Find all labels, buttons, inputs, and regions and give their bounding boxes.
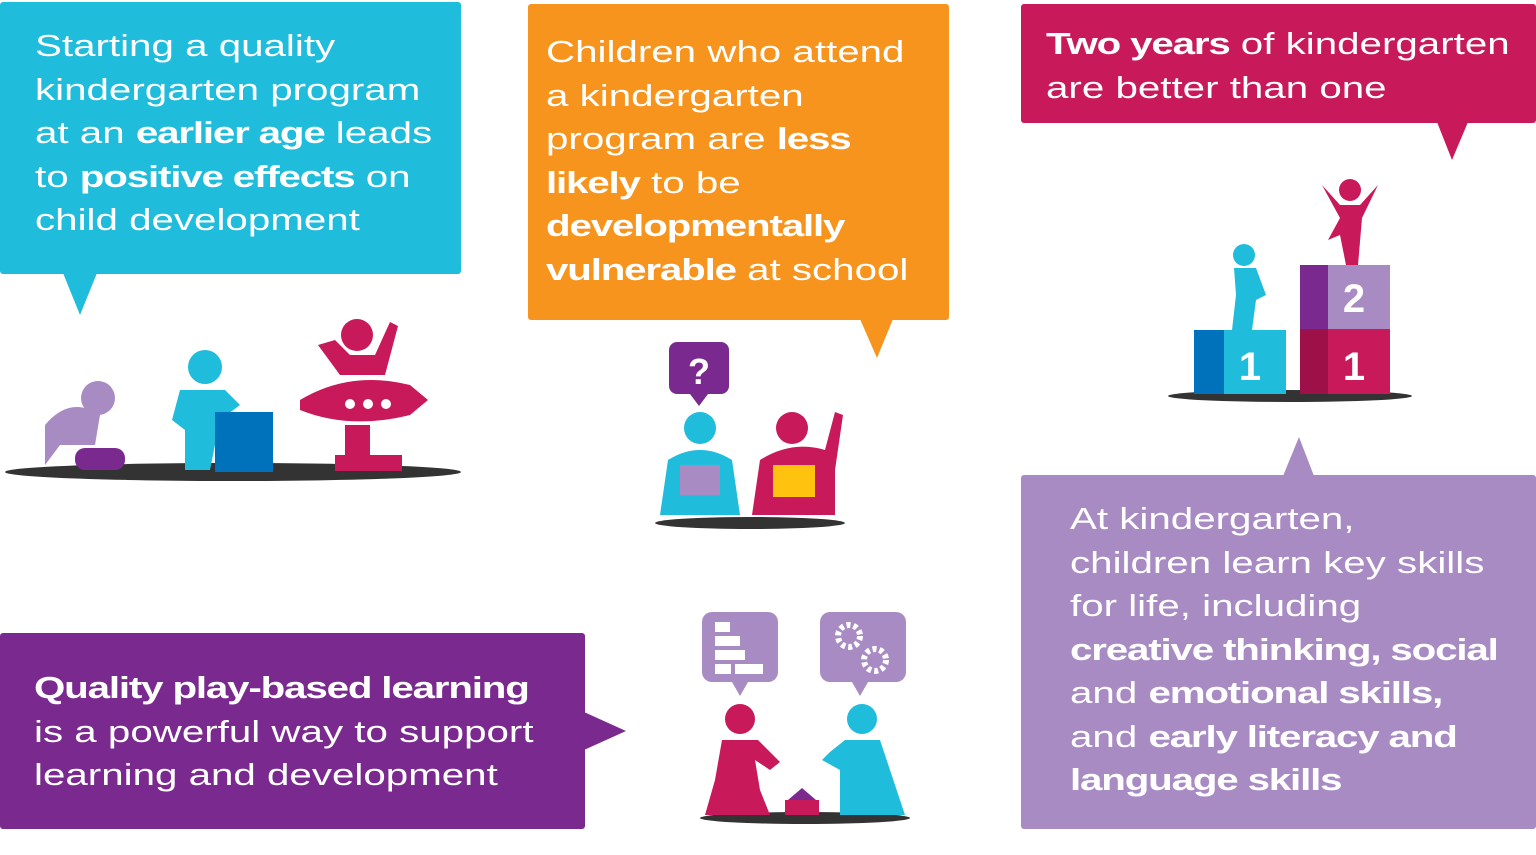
panel: lavender key skills: language skills	[1070, 762, 1341, 797]
panel: purple play-based: is a powerful way to support	[34, 714, 534, 748]
icon: podium: 2	[1343, 277, 1365, 321]
panel: purple play-based: learning and development	[34, 757, 498, 792]
panel: orange less vulnerable	[528, 4, 949, 320]
icon: children playing	[5, 319, 461, 481]
panel: blue earlier age: child development	[35, 202, 360, 237]
panel: pink two years	[1021, 4, 1536, 123]
panel: purple play-based: Quality play-based learning	[34, 670, 529, 705]
arrow: purple tail	[584, 712, 626, 750]
arrow: blue tail	[63, 273, 97, 315]
panel: lavender key skills: creative thinking, social	[1070, 632, 1498, 666]
icon: podium: 1	[1343, 345, 1365, 389]
icon: reading children: ?	[688, 351, 710, 392]
panel: lavender key skills	[1021, 475, 1536, 829]
panel: lavender key skills: children learn key skills	[1070, 544, 1484, 580]
panel: orange less vulnerable: developmentally	[546, 208, 844, 243]
panel: orange less vulnerable: program are less	[546, 121, 850, 156]
panel: orange less vulnerable: likely to be	[546, 164, 741, 200]
panel: orange less vulnerable: a kindergarten	[546, 78, 804, 112]
icon: building and thinking children	[700, 612, 910, 824]
icon: reading children	[655, 342, 845, 529]
panel: lavender key skills: and emotional skills,	[1070, 675, 1442, 710]
panel: orange less vulnerable: vulnerable at school	[546, 252, 908, 286]
arrow: orange tail	[860, 319, 893, 358]
panel: lavender key skills: for life, including	[1070, 588, 1361, 623]
panel: purple play-based	[0, 633, 585, 829]
arrow: pink tail	[1437, 122, 1468, 160]
panel: lavender key skills: and early literacy and	[1070, 718, 1457, 754]
panel: blue earlier age: kindergarten program	[35, 72, 420, 106]
panel: blue earlier age: at an earlier age leads	[35, 115, 432, 150]
panel: blue earlier age: Starting a quality	[35, 28, 335, 63]
panel: pink two years: are better than one	[1046, 70, 1387, 104]
icon: podium: 1	[1239, 345, 1261, 389]
panel: lavender key skills: At kindergarten,	[1070, 501, 1355, 536]
panel: pink two years: Two years of kindergarten	[1046, 26, 1510, 61]
arrow: lavender tail	[1283, 437, 1314, 476]
icon: podium	[1168, 179, 1412, 402]
panel: orange less vulnerable: Children who attend	[546, 34, 904, 69]
panel: blue earlier age: to positive effects on	[35, 158, 411, 194]
panel: blue earlier age	[0, 2, 461, 274]
